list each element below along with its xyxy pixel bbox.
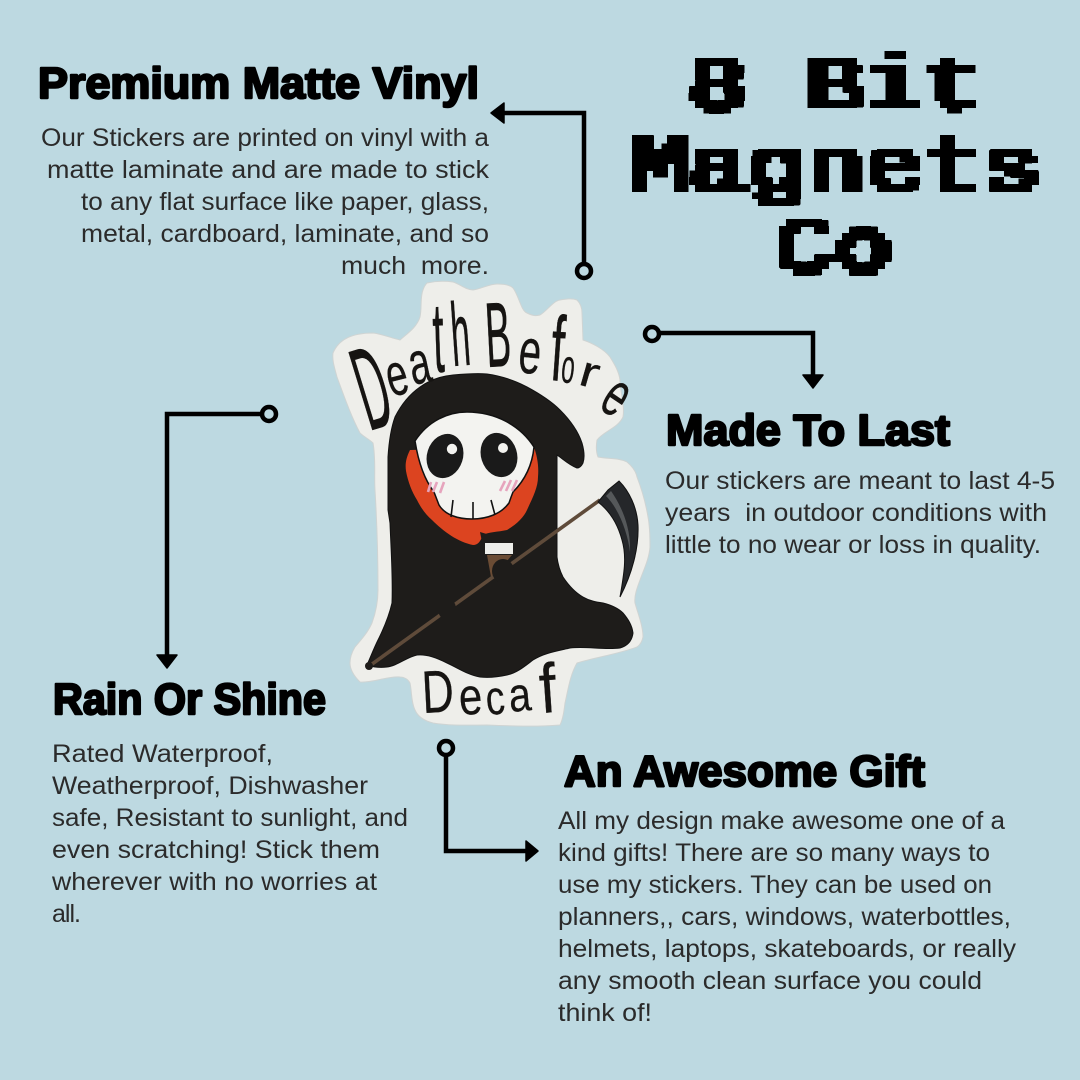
text block: rain or shine: wherever with no worries at xyxy=(51,868,377,896)
hand lettering: Decaf: a xyxy=(506,668,533,723)
text block: rain or shine xyxy=(51,740,408,928)
heading: premium matte vinyl: Premium Matte Vinyl xyxy=(38,59,479,108)
text block: premium matte vinyl xyxy=(41,124,490,280)
text block: rain or shine: safe, Resistant to sunlight, and xyxy=(52,804,408,832)
arrow: to an awesome gift xyxy=(439,741,538,861)
red hood lining xyxy=(406,447,538,545)
hand lettering: Death Before: B xyxy=(483,282,513,387)
text block: an awesome gift: use my stickers. They can be used on xyxy=(558,871,992,899)
heading: an awesome gift: An Awesome Gift xyxy=(564,747,925,796)
skull teeth xyxy=(451,500,495,519)
hand lettering: Decaf xyxy=(420,649,559,728)
hand lettering: Decaf: c xyxy=(483,671,507,726)
hand lettering: Death Before: e xyxy=(515,316,545,389)
sticker backing xyxy=(333,281,650,726)
text block: rain or shine: even scratching! Stick them xyxy=(52,836,380,864)
text block: premium matte vinyl: metal, cardboard, laminate, and so xyxy=(81,220,489,248)
text block: premium matte vinyl: to any flat surface like paper, glass, xyxy=(81,188,489,216)
scythe handle xyxy=(368,500,600,667)
hand lettering: Death Before: a xyxy=(402,328,436,398)
text block: an awesome gift: any smooth clean surface you could xyxy=(558,967,982,995)
hand lettering: Death Before: t xyxy=(431,282,446,394)
heading: made to last: Made To Last xyxy=(666,406,950,455)
arrow: to made to last xyxy=(645,327,823,388)
hand lettering: Death Before: h xyxy=(447,284,473,386)
hand lettering: Death Before: o xyxy=(559,340,578,395)
hand lettering: Decaf: e xyxy=(457,667,484,727)
text block: made to last: Our stickers are meant to last 4-5 xyxy=(665,467,1055,495)
arrow: to rain or shine xyxy=(157,407,276,668)
heading: rain or shine: Rain Or Shine xyxy=(53,675,326,724)
text block: an awesome gift: All my design make awesome one of a xyxy=(558,807,1005,835)
scythe blade xyxy=(598,481,638,597)
reaper cloak xyxy=(367,374,633,677)
text block: rain or shine: all. xyxy=(52,900,81,928)
text block: an awesome gift: kind gifts! There are so many ways to xyxy=(558,839,990,867)
text block: an awesome gift xyxy=(558,807,1017,1027)
panel: rain or shine xyxy=(51,675,408,928)
text block: an awesome gift: helmets, laptops, skateboards, or really xyxy=(558,935,1017,963)
text block: made to last: years in outdoor conditions with xyxy=(665,499,1047,527)
hand lettering: Decaf: f xyxy=(537,649,559,728)
reaper hands xyxy=(438,559,514,620)
hand lettering: Decaf: D xyxy=(420,658,455,727)
text block: an awesome gift: think of! xyxy=(558,999,652,1027)
panel: premium matte vinyl xyxy=(38,59,490,280)
panel: made to last xyxy=(665,406,1055,559)
pole butt xyxy=(365,662,373,670)
title: 8 Bit Magnets Co: Co xyxy=(775,206,893,295)
sticker: death before decaf reaper xyxy=(333,281,650,728)
title: 8 Bit Magnets Co xyxy=(630,44,1042,295)
hand lettering: Death Before xyxy=(338,282,646,455)
text block: an awesome gift: planners,, cars, windows, waterbottles, xyxy=(558,903,1011,931)
text block: premium matte vinyl: matte laminate and are made to stick xyxy=(47,156,490,184)
panel: an awesome gift xyxy=(558,747,1017,1027)
title: 8 Bit Magnets Co: 8 Bit xyxy=(688,44,982,133)
title: 8 Bit Magnets Co: Magnets xyxy=(630,125,1042,214)
hand lettering: Death Before: D xyxy=(338,320,405,455)
text block: made to last xyxy=(665,467,1055,559)
coffee cup xyxy=(480,532,514,577)
skull eyes xyxy=(421,428,523,483)
text block: rain or shine: Rated Waterproof, xyxy=(52,740,273,768)
text block: rain or shine: Weatherproof, Dishwasher xyxy=(52,772,368,800)
text block: premium matte vinyl: much more. xyxy=(341,252,489,280)
text block: premium matte vinyl: Our Stickers are printed on vinyl with a xyxy=(41,124,489,152)
hand lettering: Death Before: e xyxy=(589,360,646,431)
text block: made to last: little to no wear or loss in quality. xyxy=(665,531,1041,559)
hand lettering: Death Before: r xyxy=(574,345,606,398)
hand lettering: Death Before: e xyxy=(378,340,415,410)
blush marks xyxy=(428,480,517,493)
hand lettering: Death Before: f xyxy=(548,297,568,401)
skull xyxy=(415,412,534,519)
arrow: to premium matte vinyl xyxy=(491,103,591,278)
